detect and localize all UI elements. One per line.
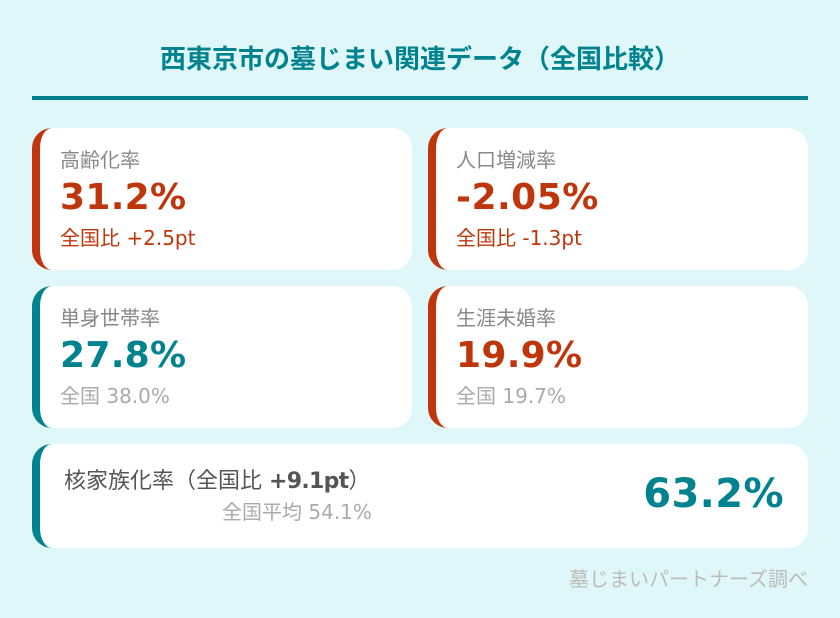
label: 核家族化率（全国比 +9.1pt） <box>64 469 370 494</box>
panel: lifetime unmarried <box>428 286 808 428</box>
value: 31.2% <box>60 177 186 218</box>
comparison: 全国 19.7% <box>456 384 566 408</box>
title: 西東京市の墓じまい関連データ（全国比較） <box>160 45 680 75</box>
comparison: 全国比 -1.3pt <box>456 226 582 250</box>
panel: aging rate <box>32 128 412 270</box>
value: 19.9% <box>456 335 582 376</box>
national average: 全国平均 54.1% <box>222 500 372 524</box>
title rule <box>32 96 808 100</box>
label: 生涯未婚率 <box>456 306 556 330</box>
value: 27.8% <box>60 335 186 376</box>
comparison: 全国比 +2.5pt <box>60 226 195 250</box>
panel: nuclear family <box>32 444 808 548</box>
panel: single households <box>32 286 412 428</box>
source note: 墓じまいパートナーズ調べ <box>569 567 808 591</box>
label: 単身世帯率 <box>60 306 160 330</box>
comparison: 全国 38.0% <box>60 384 170 408</box>
label: 人口増減率 <box>456 148 556 172</box>
value: -2.05% <box>456 177 599 218</box>
value: 63.2% <box>643 471 784 517</box>
label: 高齢化率 <box>60 148 140 172</box>
panel: population change <box>428 128 808 270</box>
